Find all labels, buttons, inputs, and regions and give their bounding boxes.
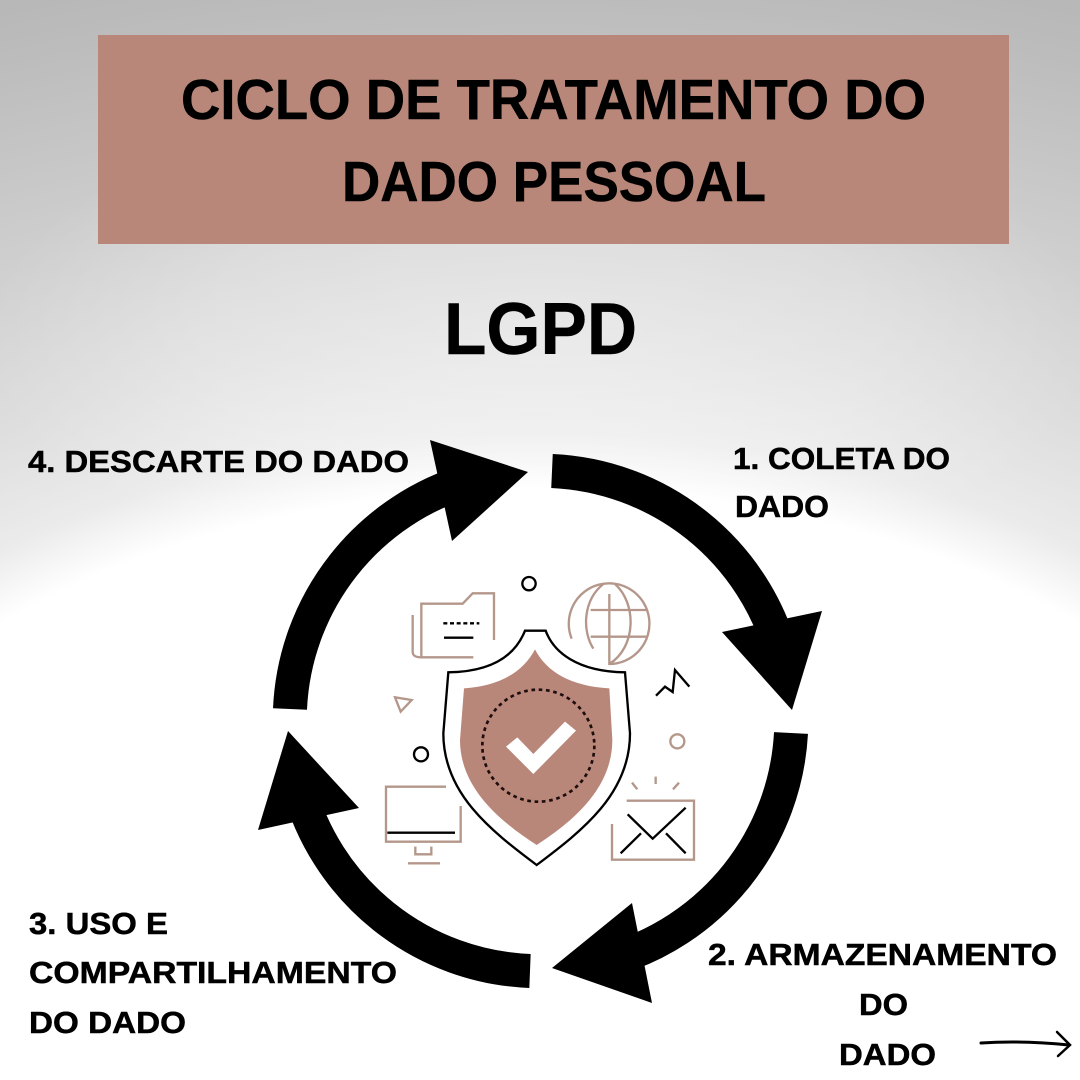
central security illustration (386, 577, 694, 865)
title panel (98, 35, 1009, 244)
step 2 label: 2. ARMAZENAMENTO (708, 937, 1057, 972)
step 1 label (733, 441, 950, 524)
icon: small circle right (670, 734, 684, 748)
step 3 label (29, 906, 397, 1040)
title text: CICLO DE TRATAMENTO DO (181, 68, 926, 132)
small hand-drawn arrow (981, 1032, 1070, 1056)
icon: spark zigzag (656, 670, 689, 696)
step 3 label: COMPARTILHAMENTO (29, 955, 397, 990)
step 2 label: DADO (839, 1037, 936, 1072)
arrow 1: coleta to armazenamento (552, 471, 822, 710)
arrow 4: descarte to coleta (290, 440, 528, 709)
step 1 label: DADO (735, 489, 829, 524)
step 1 label: 1. COLETA DO (733, 441, 950, 476)
step 3 label: 3. USO E (29, 906, 168, 941)
arrow 2: armazenamento to uso (552, 733, 791, 1003)
step 3 label: DO DADO (29, 1005, 186, 1040)
title text (181, 68, 926, 214)
step 2 label (708, 937, 1057, 1072)
icon: computer monitor (386, 787, 461, 863)
icon: shield (443, 631, 630, 865)
arrow 3: uso to descarte (258, 731, 530, 971)
heading: LGPD: LGPD (444, 289, 637, 370)
icon: envelope (612, 777, 694, 860)
icon: small circle top (522, 577, 536, 590)
icon: triangle (395, 697, 412, 712)
icon: small circle left (414, 747, 428, 761)
icon: globe (569, 583, 649, 664)
step 4 label: 4. DESCARTE DO DADO (28, 444, 409, 479)
title text: DADO PESSOAL (342, 150, 766, 214)
step 2 label: DO (859, 987, 908, 1022)
icon: folder (413, 593, 494, 657)
